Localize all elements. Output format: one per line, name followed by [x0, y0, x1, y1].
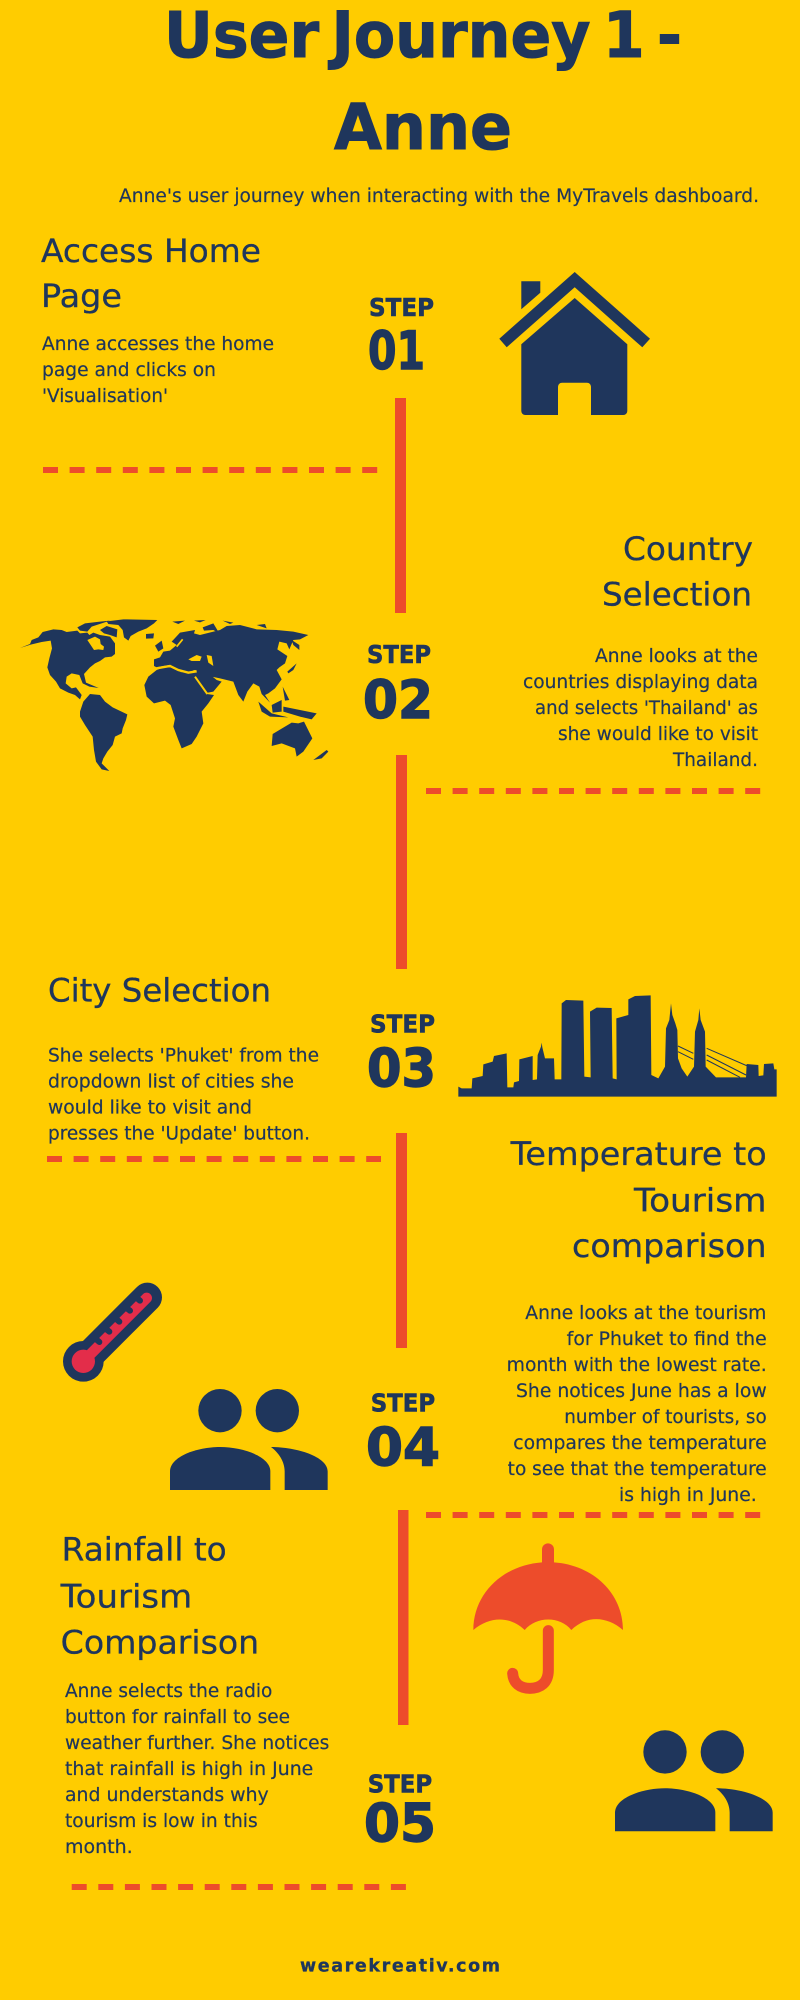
text block: step 4 description: to see that the temperature [508, 1459, 767, 1480]
connector bar 4 [398, 1510, 408, 1725]
connector bar 1 [395, 398, 406, 613]
text block: step 4 description: Anne looks at the tourism [525, 1303, 766, 1324]
text block: step 5 description: Anne selects the radio [65, 1681, 272, 1702]
text block: step 3 description: She selects 'Phuket' from the [48, 1046, 319, 1067]
heading: rainfall to tourism comparison [60, 1531, 259, 1661]
text block: step 3 description: would like to visit and [48, 1098, 252, 1119]
step label 03: STEP [370, 1010, 435, 1039]
heading: access home page: Access Home [41, 232, 261, 270]
subtitle: Anne's user journey when interacting with the MyTravels dashboard. [119, 186, 759, 207]
text block: step 4 description: is high in June. [619, 1485, 757, 1506]
text block: step 1 description [42, 334, 274, 407]
panel: step 2 country selection [20, 530, 761, 791]
step label 05: 05 [364, 1794, 436, 1855]
dashed divider step 5 [72, 1884, 406, 1890]
step label 02 [363, 640, 433, 731]
icon: world map [20, 619, 328, 771]
icon: people [170, 1389, 328, 1490]
text block: step 2 description: Thailand. [672, 750, 758, 771]
heading: temperature to tourism comparison: Tourism [633, 1182, 766, 1220]
heading: country selection: Selection [602, 576, 752, 614]
icon: thermometer [63, 1297, 147, 1382]
step label 04 [366, 1389, 440, 1479]
step label 02: 02 [363, 670, 433, 731]
text block: step 4 description: number of tourists, so [564, 1407, 767, 1428]
text block: step 3 description: presses the 'Update' button. [48, 1124, 310, 1145]
heading: city selection: City Selection [48, 972, 271, 1010]
text block: step 1 description: Anne accesses the home [42, 334, 274, 355]
text block: step 5 description: weather further. She notices [65, 1733, 329, 1754]
heading: temperature to tourism comparison: Temperature to [510, 1135, 767, 1173]
icon: house [499, 272, 650, 415]
dashed divider step 1 [43, 467, 378, 473]
step label 01: 01 [368, 321, 425, 382]
icon: umbrella [473, 1543, 623, 1688]
text block: step 2 description [523, 646, 758, 771]
text block: step 2 description: she would like to visit [558, 724, 758, 745]
text block: step 5 description: month. [65, 1837, 133, 1858]
text block: step 2 description: Anne looks at the [595, 646, 758, 667]
heading: rainfall to tourism comparison: Comparison [61, 1623, 259, 1661]
text block: step 3 description: dropdown list of cities she [48, 1072, 294, 1093]
text block: step 2 description: countries displaying data [523, 672, 758, 693]
icon: people [615, 1730, 773, 1831]
heading: access home page: Page [41, 277, 122, 315]
connector bar 3 [396, 1133, 407, 1348]
icon: city skyline [458, 995, 777, 1097]
heading: rainfall to tourism comparison: Tourism [60, 1577, 192, 1615]
step label 04: 04 [366, 1418, 440, 1479]
title: Anne [334, 91, 512, 164]
heading: rainfall to tourism comparison: Rainfall to [62, 1531, 227, 1569]
panel: step 5 rainfall to tourism comparison [60, 1531, 773, 1887]
text block: step 5 description: tourism is low in this [65, 1811, 258, 1832]
text block: step 5 description: that rainfall is high in June [65, 1759, 313, 1780]
connector bar 2 [396, 755, 407, 969]
step label 03: 03 [367, 1039, 436, 1100]
text block: step 5 description: button for rainfall to see [65, 1707, 290, 1728]
text block: step 2 description: and selects 'Thailand' as [535, 698, 758, 719]
step label 01: STEP [369, 293, 434, 322]
text block: step 4 description: for Phuket to find the [567, 1329, 767, 1350]
footer brand: wearekreativ.com [300, 1957, 500, 1977]
text block: step 1 description: page and clicks on [42, 360, 216, 381]
step label 04: STEP [371, 1389, 435, 1418]
heading: country selection: Country [623, 530, 753, 568]
step label 05: STEP [368, 1770, 432, 1799]
step label 01 [368, 293, 434, 382]
text block: step 5 description [65, 1681, 329, 1858]
dashed divider step 3 [47, 1156, 381, 1162]
panel: step 3 city selection [47, 972, 777, 1159]
text block: step 1 description: 'Visualisation' [42, 386, 168, 407]
dashed divider step 2 [426, 788, 761, 794]
text block: step 4 description: compares the temperature [513, 1433, 767, 1454]
heading: temperature to tourism comparison: comparison [572, 1227, 766, 1265]
heading: country selection [602, 530, 753, 614]
text block: step 4 description: She notices June has a low [516, 1381, 767, 1402]
title [164, 0, 682, 164]
heading: temperature to tourism comparison [510, 1135, 767, 1265]
panel: step 1 access home page [41, 232, 650, 470]
step label 02: STEP [367, 640, 431, 669]
panel: step 4 temperature to tourism comparison [63, 1135, 767, 1515]
title: User Journey 1 - [164, 0, 682, 72]
step label 03 [367, 1010, 436, 1100]
text block: step 4 description: month with the lowest rate. [507, 1355, 767, 1376]
heading: access home page [41, 232, 261, 315]
text block: step 5 description: and understands why [65, 1785, 269, 1806]
text block: step 3 description [48, 1046, 319, 1145]
text block: step 4 description [507, 1303, 767, 1506]
dashed divider step 4 [426, 1512, 761, 1518]
